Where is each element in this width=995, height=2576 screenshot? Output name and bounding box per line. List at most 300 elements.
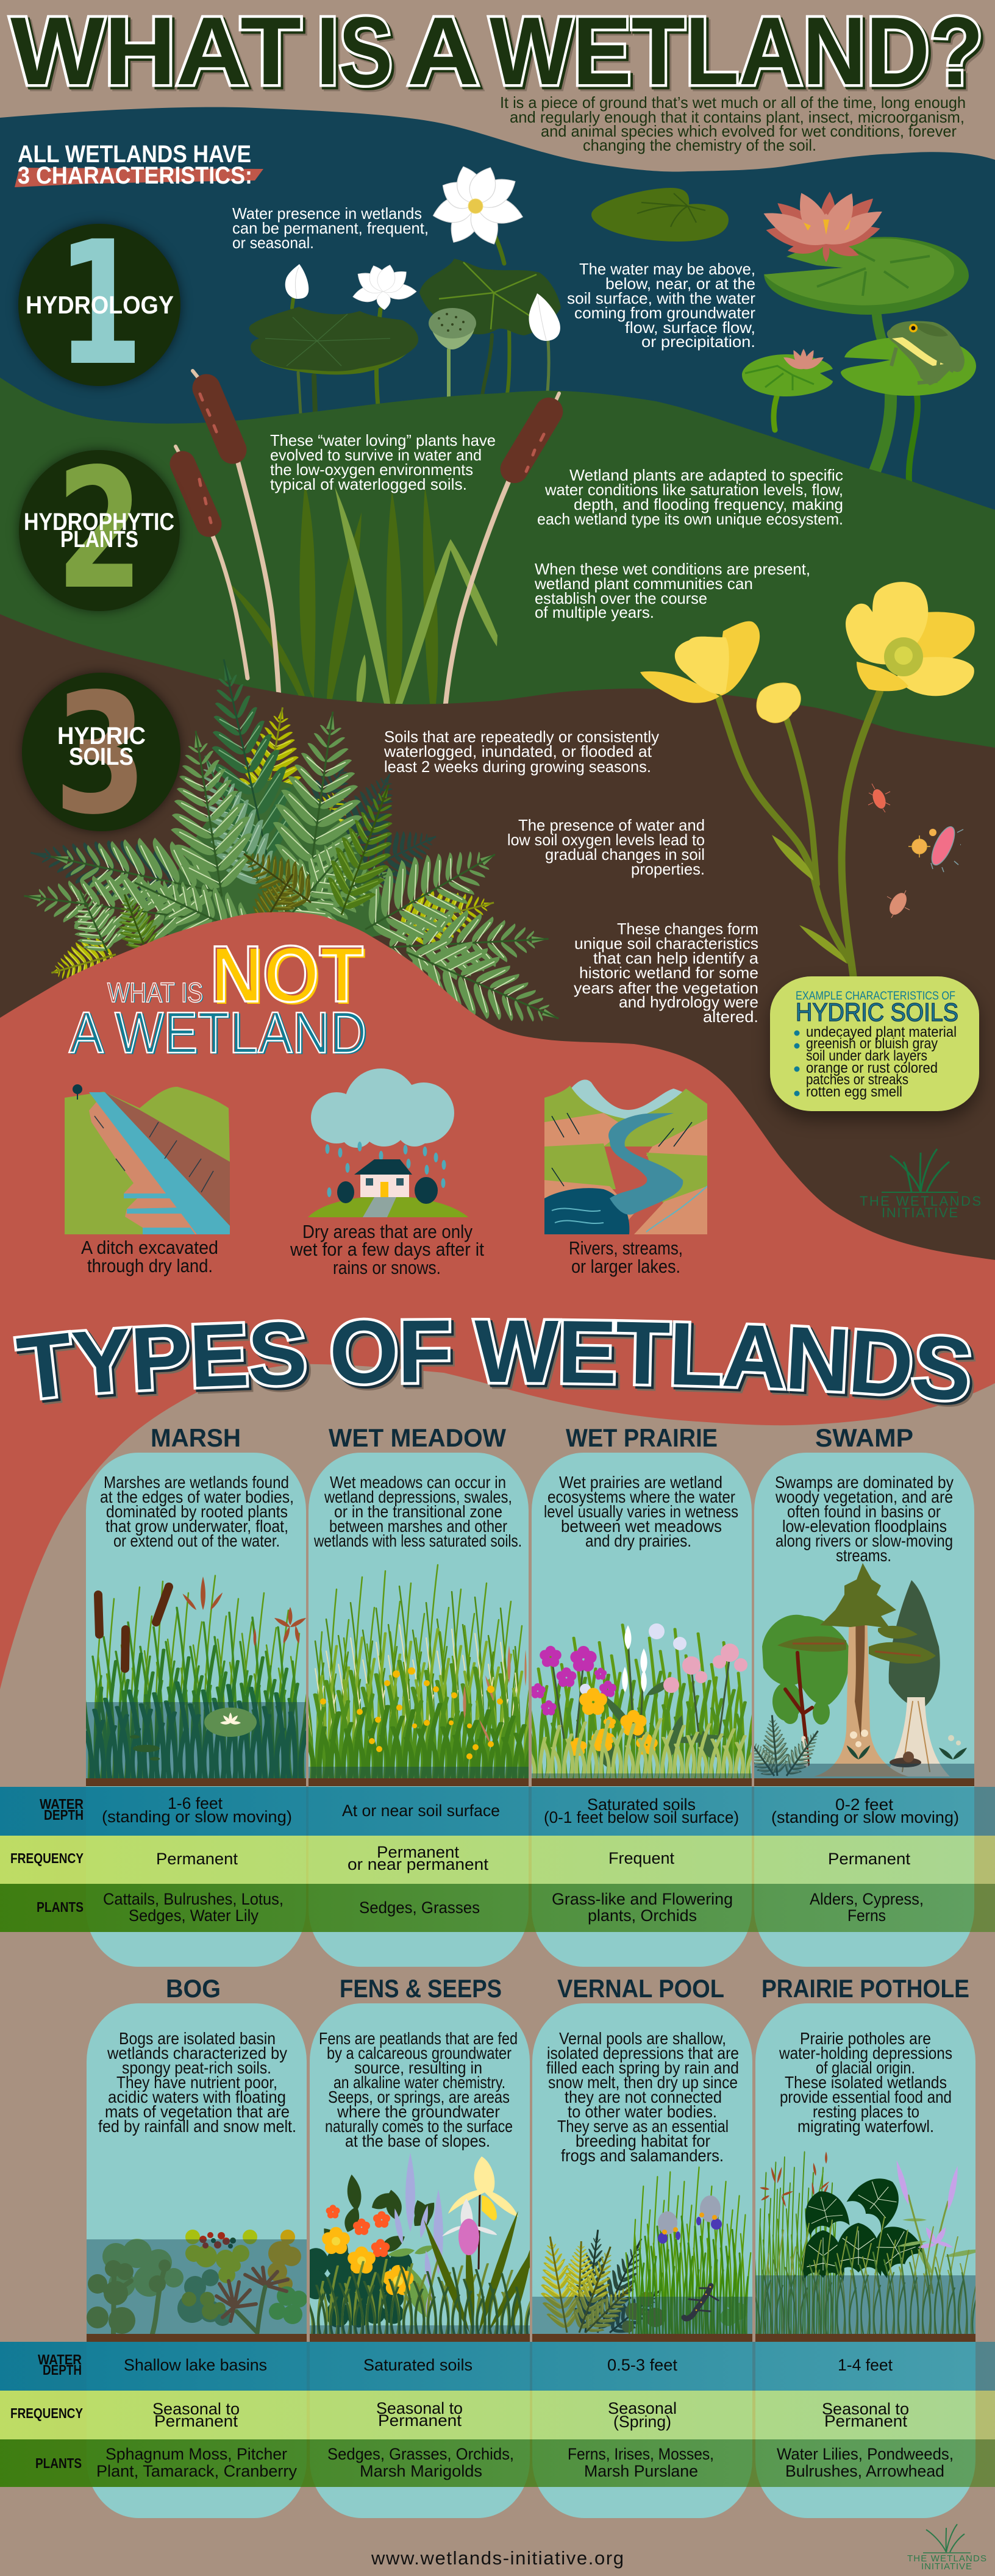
text: vernal pool description: they are not connected: [565, 2088, 722, 2106]
yellow flower stems: [718, 692, 880, 979]
table values: fens and seeps: Seasonal to: [376, 2399, 463, 2417]
card heading: HYDRIC SOILS: [796, 998, 958, 1026]
body text: adapted plants: Wetland plants are adapted to specific: [569, 466, 843, 484]
text: fens and seeps description: source, resulting in: [354, 2058, 482, 2077]
white bells: [622, 1625, 647, 1692]
text: vernal pool description: snow melt, then dry up since: [548, 2073, 738, 2092]
table values: fens and seeps: Saturated soils: [363, 2356, 473, 2374]
intro text block: and animal species which evolved for wet conditions, forever: [541, 122, 957, 140]
table values: prairie pothole: Water Lilies, Pondweeds,: [777, 2445, 954, 2463]
what is: WHAT IS: [107, 977, 203, 1008]
white and pink orchid: [442, 2199, 497, 2255]
text: fens and seeps description: Fens are peatlands that are fed: [319, 2029, 518, 2048]
table values: vernal pool: Marsh Purslane: [584, 2462, 698, 2480]
row labels: top row: PLANTS: [37, 1899, 84, 1915]
yellow orchid: [448, 2156, 518, 2269]
text: prairie pothole description: resting places to: [813, 2102, 919, 2121]
rivers caption: Rivers, streams,: [569, 1237, 683, 1259]
text: wet meadow description: wetlands with less saturated soils.: [313, 1531, 522, 1550]
white lotus flower: top: [430, 163, 526, 249]
table values: fens and seeps: [327, 2356, 514, 2480]
heading text: 3 CHARACTERISTICS:: [18, 162, 252, 189]
table values: vernal pool: Seasonal: [608, 2399, 677, 2417]
body text: water loving plants: These “water loving” plants have: [270, 431, 496, 449]
table values: fens and seeps: Sedges, Grasses, Orchids,: [327, 2445, 514, 2463]
row labels: bottom row: FREQUENCY: [10, 2405, 83, 2421]
left tree: [762, 1615, 849, 1766]
text: marsh description: or extend out of the water.: [113, 1531, 280, 1550]
table values: swamp: [771, 1795, 959, 1925]
text: vernal pool description: frogs and salamanders.: [561, 2146, 724, 2165]
body text: presence of water: properties.: [631, 860, 705, 878]
table values: swamp: (standing or slow moving): [771, 1808, 959, 1826]
red brush highlight: [15, 168, 263, 187]
yellow ferns: [531, 2233, 596, 2336]
text: fens and seeps description: naturally comes to the surface: [325, 2117, 513, 2136]
text: vernal pool description: filled each spring by rain and: [546, 2058, 739, 2077]
golden flowers: [322, 2227, 413, 2295]
text: wet prairie description: level usually varies in wetness: [544, 1502, 738, 1521]
table values: vernal pool: (Spring): [613, 2413, 671, 2431]
clover leaves: [303, 2248, 412, 2328]
body text: water presence: Water presence in wetlands: [232, 204, 422, 223]
lily pad: [204, 1708, 257, 1737]
text: marsh description: at the edges of water bodies,: [100, 1487, 294, 1506]
cattail heads: [98, 1587, 169, 1669]
water lily pad: large with pink bloom: [759, 188, 969, 315]
row labels: bottom row: WATER: [38, 2352, 82, 2367]
card heading: EXAMPLE CHARACTERISTICS OF: [796, 990, 955, 1003]
rust flowers: [760, 2152, 830, 2207]
table values: prairie pothole: 1-4 feet: [838, 2356, 893, 2374]
text: bog description: wetlands characterized by: [107, 2044, 287, 2063]
pink lotus flower: [759, 188, 887, 262]
dark tree: [885, 1580, 950, 1776]
illustration: wet meadow plants: [305, 1565, 534, 1778]
body text: plant communities: establish over the course: [535, 589, 707, 607]
illustration: bog plants: [87, 2230, 307, 2334]
text: vernal pool description: to other water bodies.: [568, 2102, 717, 2121]
body text: presence of water: gradual changes in soil: [545, 845, 705, 864]
pale front grass: [528, 1719, 755, 1778]
cattails: [166, 370, 568, 704]
card bullet list: undecayed plant material: [806, 1024, 957, 1040]
dry areas caption: [290, 1221, 484, 1278]
pink clusters: [663, 1644, 747, 1693]
reed blades: [224, 484, 498, 704]
yellow flower: open bloom: [846, 582, 975, 696]
table values: bog: Seasonal to: [152, 2400, 240, 2418]
body text: water position: soil surface, with the water: [567, 289, 755, 307]
dry areas caption: rains or snows.: [333, 1257, 441, 1278]
table values: wet meadow: [342, 1801, 500, 1917]
illustration: prairie pothole plants: [752, 2152, 985, 2334]
yellow moss: [185, 2230, 257, 2283]
card bullet list: patches or streaks: [806, 1072, 908, 1088]
what is: WHAT IS: [109, 978, 204, 1009]
card bullet list: soil under dark layers: [806, 1048, 927, 1064]
body text: adapted plants: each wetland type its own unique ecosystem.: [537, 510, 843, 528]
text: wet meadow description: between marshes and other: [329, 1517, 507, 1536]
icon: ditch: [65, 1084, 230, 1234]
text: prairie pothole description: water-holding depressions: [779, 2044, 952, 2063]
circle badge 2: hydrophytic plants: 2: [56, 434, 143, 626]
card bullet list: [794, 1024, 957, 1100]
text: fens and seeps description: an alkaline water chemistry.: [333, 2073, 505, 2092]
data bands: bottom row: [0, 2342, 995, 2487]
background: red what-is-not band: [0, 912, 995, 2576]
text: wet prairie description: [544, 1473, 738, 1550]
teal moss: [177, 2269, 231, 2326]
green moss: [269, 2286, 307, 2324]
text: bog description: mats of vegetation that are: [105, 2102, 290, 2121]
table values: vernal pool: Ferns, Irises, Mosses,: [568, 2445, 714, 2463]
column headings: top row: MARSH: [151, 1423, 241, 1452]
text: wet meadow description: or in the transitional zone: [334, 1502, 502, 1521]
table values: marsh: Permanent: [156, 1850, 238, 1868]
text: wet meadow description: wetland depressions, swales,: [324, 1487, 512, 1506]
body text: water presence: [232, 204, 429, 252]
title: WHAT: [10, 0, 301, 105]
rust anemones: [216, 2267, 288, 2321]
soil strips: top row: [86, 1778, 974, 1786]
table values: bog: Shallow lake basins: [124, 2356, 267, 2374]
body text: water position: flow, surface flow,: [625, 318, 755, 337]
text: bog description: Bogs are isolated basin: [119, 2029, 276, 2048]
panel: hydric soils example card: [770, 976, 979, 1111]
body text: water position: [567, 260, 755, 351]
heading: types of wetlands: TYPES OF WETLANDS: [13, 1317, 975, 1407]
reeds left: [754, 2153, 840, 2334]
text: prairie pothole description: migrating waterfowl.: [797, 2117, 934, 2136]
dry areas caption: wet for a few days after it: [290, 1239, 484, 1260]
text: wet meadow description: Wet meadows can occur in: [330, 1473, 506, 1492]
rain drops: [326, 1142, 446, 1197]
heading text: ALL WETLANDS HAVE: [18, 141, 251, 168]
table values: swamp: Ferns: [847, 1906, 886, 1925]
circle badge 3: hydric soils: HYDRIC: [57, 723, 146, 750]
table values: prairie pothole: Bulrushes, Arrowhead: [785, 2462, 944, 2480]
text: vernal pool description: They serve as an essential: [557, 2117, 729, 2136]
table values: wet prairie: Frequent: [608, 1849, 674, 1867]
intro text block: It is a piece of ground that’s wet much or all of the time, long enough: [500, 93, 966, 112]
column headings: top row: SWAMP: [815, 1423, 913, 1452]
body text: presence of water: The presence of water and: [518, 816, 705, 834]
text: fens and seeps description: where the groundwater: [337, 2102, 500, 2121]
body text: water position: or precipitation.: [641, 332, 755, 351]
text: wet prairie description: ecosystems where the water: [547, 1487, 735, 1506]
body text: water loving plants: the low-oxygen environments: [270, 460, 473, 479]
cloud: [311, 1068, 454, 1148]
table values: wet prairie: Grass-like and Flowering: [552, 1890, 733, 1908]
table values: wet prairie: plants, Orchids: [588, 1906, 697, 1925]
footer url: www.wetlands-initiative.org: [371, 2547, 624, 2569]
table values: marsh: 1-6 feet: [168, 1794, 223, 1812]
rust spikes: [463, 1645, 527, 1745]
column headings: bottom row: [166, 1974, 969, 2003]
background: tan lower band: [0, 1364, 995, 2576]
microbes: [868, 784, 963, 918]
ferns: [740, 1714, 827, 1783]
house: [354, 1159, 412, 1197]
background: hydrology water band: [0, 107, 995, 549]
text: bog description: acidic waters with floating: [108, 2088, 286, 2106]
not: NOT: [212, 931, 366, 1021]
a wetland: A WETLAND: [71, 1001, 368, 1067]
row labels: bottom row: [10, 2352, 83, 2471]
text: fens and seeps description: at the base of slopes.: [345, 2131, 490, 2150]
icon: frog: [887, 321, 965, 385]
illustration: swamp trees: [740, 1563, 974, 1783]
green leaves right: [896, 2219, 985, 2276]
illustration: vernal pool plants: [531, 2167, 752, 2343]
dark lichen: [87, 2259, 171, 2334]
lotus buds: [285, 264, 560, 341]
arrowhead leaves: [799, 2167, 927, 2281]
white lotus flower: small: [352, 263, 416, 310]
ditch caption: through dry land.: [87, 1255, 213, 1276]
heading text: [18, 141, 252, 189]
text: marsh description: that grow underwater, float,: [105, 1517, 288, 1536]
body text: soils: least 2 weeks during growing seasons.: [384, 757, 651, 776]
text: swamp description: low-elevation floodplains: [782, 1517, 947, 1536]
column headings: bottom row: PRAIRIE POTHOLE: [761, 1974, 969, 2003]
text: swamp description: along rivers or slow-moving: [776, 1531, 953, 1550]
berries: [199, 2232, 230, 2249]
irises: [658, 2195, 722, 2244]
text: vernal pool description: breeding habitat for: [576, 2131, 710, 2150]
water overlay: [308, 1767, 529, 1778]
hill: [308, 1196, 468, 1217]
illustration: marsh plants: [82, 1576, 310, 1778]
magenta flowers: [530, 1646, 616, 1716]
intro text block: [500, 93, 966, 154]
illustration: wet prairie flowers: [528, 1623, 755, 1778]
body text: water presence: or seasonal.: [232, 234, 314, 252]
rust seed heads: [181, 1576, 307, 1647]
rivers caption: [569, 1237, 683, 1277]
a wetland: A WETLAND: [69, 1000, 366, 1065]
salamander: [683, 2286, 718, 2319]
water overlay: [754, 1764, 974, 1778]
body text: unique soil characteristics: and hydrology were: [619, 993, 758, 1011]
body text: water position: below, near, or at the: [605, 274, 755, 293]
background: hydric soils brown band: [0, 614, 995, 1342]
column headings: top row: [151, 1423, 913, 1452]
text: swamp description: streams.: [836, 1546, 891, 1565]
body text: adapted plants: depth, and flooding frequency, making: [574, 495, 843, 513]
table values: bog: Permanent: [154, 2412, 238, 2430]
logo: footer: [907, 2524, 986, 2572]
dark foliage: [318, 2174, 440, 2262]
text: prairie pothole description: Prairie potholes are: [800, 2029, 931, 2048]
intro text block: changing the chemistry of the soil.: [583, 136, 816, 154]
table values: bog: Sphagnum Moss, Pitcher: [105, 2445, 287, 2463]
heading: what is not a wetland: [69, 929, 368, 1067]
row labels: top row: FREQUENCY: [10, 1850, 84, 1866]
logo: the wetlands initiative: INITIATIVE: [882, 1205, 958, 1220]
rivers caption: or larger lakes.: [571, 1256, 680, 1277]
table values: swamp: 0-2 feet: [835, 1795, 894, 1814]
body text: unique soil characteristics: These changes form: [617, 920, 758, 938]
lotus leaf: large right: [419, 259, 561, 335]
dark ferns: [570, 2228, 669, 2343]
text: swamp description: [775, 1473, 954, 1565]
lotus seed pod: [429, 308, 476, 349]
front grasses: [752, 2216, 979, 2334]
text: bog description: They have nutrient poor,: [116, 2073, 277, 2092]
circle badge 1: hydrology: 1: [57, 205, 143, 404]
table values: fens and seeps: Marsh Marigolds: [360, 2462, 482, 2480]
text: marsh description: [100, 1473, 294, 1550]
panel backgrounds: bottom row wetland columns: [87, 2003, 975, 2518]
text: wet prairie description: between wet meadows: [561, 1517, 722, 1536]
card bullet list: rotten egg smell: [806, 1084, 902, 1100]
table values: prairie pothole: Seasonal to: [822, 2400, 909, 2418]
heading: all wetlands have 3 characteristics: [15, 141, 263, 189]
ditch caption: A ditch excavated: [81, 1237, 218, 1258]
body text: unique soil characteristics: [574, 920, 759, 1026]
table values: wet meadow: Sedges, Grasses: [359, 1898, 480, 1917]
title: IS: [316, 0, 393, 105]
logo: footer: INITIATIVE: [921, 2561, 972, 2572]
text: wet meadow description: [313, 1473, 522, 1550]
fern cluster: [20, 651, 573, 1052]
title: A: [407, 0, 479, 105]
table values: vernal pool: [568, 2356, 714, 2480]
body text: plant communities: [534, 560, 810, 621]
water overlay: [755, 2275, 975, 2334]
panel backgrounds: top row wetland columns: [86, 1453, 974, 1967]
yellow flower: left bloom: [640, 621, 760, 703]
lavender spikes: [392, 2153, 443, 2318]
body text: water position: coming from groundwater: [574, 304, 755, 322]
tadpole: [130, 1735, 160, 1761]
body text: water loving plants: typical of waterlogged soils.: [270, 475, 467, 493]
table values: swamp: Permanent: [828, 1850, 911, 1868]
icon: rain cloud and house: [308, 1068, 468, 1217]
text: fens and seeps description: Seeps, or springs, are areas: [328, 2088, 510, 2106]
water lily pad: lower left with small bloom: [742, 348, 833, 396]
water overlay: [532, 2297, 752, 2334]
text: fens and seeps description: by a calcareous groundwater: [327, 2044, 512, 2063]
text: swamp description: woody vegetation, and are: [775, 1487, 953, 1506]
table values: bog: Plant, Tamarack, Cranberry: [96, 2462, 297, 2480]
card bullet list: orange or rust colored: [806, 1060, 938, 1076]
grass clump: [626, 2167, 751, 2334]
body text: unique soil characteristics: unique soil characteristics: [574, 934, 758, 953]
table values: vernal pool: 0.5-3 feet: [607, 2356, 678, 2374]
text: vernal pool description: isolated depressions that are: [547, 2044, 739, 2063]
row labels: top row: [10, 1796, 84, 1915]
circle badge 2: hydrophytic plants: HYDROPHYTIC: [24, 509, 174, 535]
amber moss: [268, 2230, 301, 2291]
lavender spikes: [894, 2159, 960, 2250]
body text: water loving plants: evolved to survive in water and: [270, 446, 482, 464]
table values: wet meadow: or near permanent: [348, 1855, 489, 1873]
ditch caption: [81, 1237, 218, 1276]
body text: unique soil characteristics: years after the vegetation: [574, 979, 758, 997]
dry areas caption: Dry areas that are only: [302, 1221, 473, 1242]
icon: river: [544, 1079, 707, 1234]
table values: prairie pothole: [777, 2356, 954, 2480]
text: wet prairie description: Wet prairies are wetland: [559, 1473, 722, 1492]
lichen back: [102, 2239, 184, 2297]
olive moss: [182, 2292, 226, 2320]
lavender blooms: [580, 1623, 687, 1695]
orange-red blooms: [326, 2205, 390, 2257]
table values: wet prairie: Saturated soils: [587, 1795, 696, 1814]
text: prairie pothole description: of glacial origin.: [816, 2058, 915, 2077]
text: prairie pothole description: provide essential food and: [780, 2088, 952, 2106]
lotus plant stems: [292, 229, 918, 482]
body text: plant communities: When these wet conditions are present,: [535, 560, 810, 578]
body text: soils: Soils that are repeatedly or consistently: [384, 728, 659, 746]
table values: wet prairie: (0-1 feet below soil surface): [544, 1808, 739, 1826]
text: prairie pothole description: These isolated wetlands: [785, 2073, 947, 2092]
text: marsh description: Marshes are wetlands found: [104, 1473, 289, 1492]
table values: wet meadow: At or near soil surface: [342, 1801, 500, 1820]
yellow flowers: [568, 1688, 658, 1756]
table values: wet meadow: Permanent: [377, 1843, 460, 1861]
circle badge 1: hydrology: HYDROLOGY: [26, 291, 174, 319]
table values: bog: [96, 2356, 297, 2480]
fern core mass: [159, 781, 390, 964]
table values: marsh: (standing or slow moving): [102, 1808, 292, 1826]
body text: water loving plants: [270, 431, 496, 493]
text: swamp description: Swamps are dominated by: [775, 1473, 954, 1492]
yellow flower: bud: [757, 683, 801, 723]
olive grass and blades: [306, 2257, 533, 2334]
text: bog description: fed by rainfall and snow melt.: [98, 2117, 296, 2136]
illustration: fens and seeps plants: [303, 2153, 564, 2334]
body text: water presence: can be permanent, frequent,: [232, 219, 429, 237]
body text: presence of water: [507, 816, 705, 878]
body text: unique soil characteristics: altered.: [703, 1007, 758, 1026]
text: vernal pool description: [546, 2029, 739, 2165]
table values: fens and seeps: Permanent: [378, 2411, 462, 2430]
data bands: top row: [0, 1787, 995, 1932]
body text: plant communities: of multiple years.: [535, 603, 654, 621]
row labels: top row: WATER: [40, 1796, 84, 1812]
cypress: [777, 1563, 936, 1776]
column headings: top row: WET MEADOW: [329, 1423, 506, 1452]
bushes: [337, 1177, 438, 1204]
background: hydrophytic plants green band: [0, 377, 995, 793]
text: swamp description: often found in basins or: [787, 1502, 941, 1521]
circle badge 3: hydric soils: SOILS: [69, 743, 134, 770]
soil strips: bottom row: [87, 2334, 975, 2342]
text: bog description: [98, 2029, 296, 2136]
lotus leaf: large left: [249, 307, 418, 374]
column headings: bottom row: FENS & SEEPS: [340, 1974, 502, 2003]
circle badge 2: hydrophytic plants: PLANTS: [60, 527, 138, 553]
text: prairie pothole description: [779, 2029, 952, 2136]
table values: prairie pothole: Permanent: [824, 2412, 908, 2430]
body text: unique soil characteristics: that can help identify a: [593, 949, 759, 967]
title: [10, 0, 983, 105]
flowering shrubs: [845, 1744, 968, 1761]
body text: adapted plants: [537, 466, 843, 528]
text: wet prairie description: and dry prairies.: [585, 1531, 691, 1550]
body text: water position: The water may be above,: [579, 260, 755, 278]
table values: marsh: Sedges, Water Lily: [129, 1906, 259, 1925]
water lily pad: top: [591, 188, 729, 242]
intro text block: and regularly enough that it contains plant, insect, microorganism,: [510, 108, 965, 126]
text: fens and seeps description: [319, 2029, 518, 2150]
not: NOT: [210, 929, 363, 1018]
table values: marsh: [102, 1794, 292, 1925]
